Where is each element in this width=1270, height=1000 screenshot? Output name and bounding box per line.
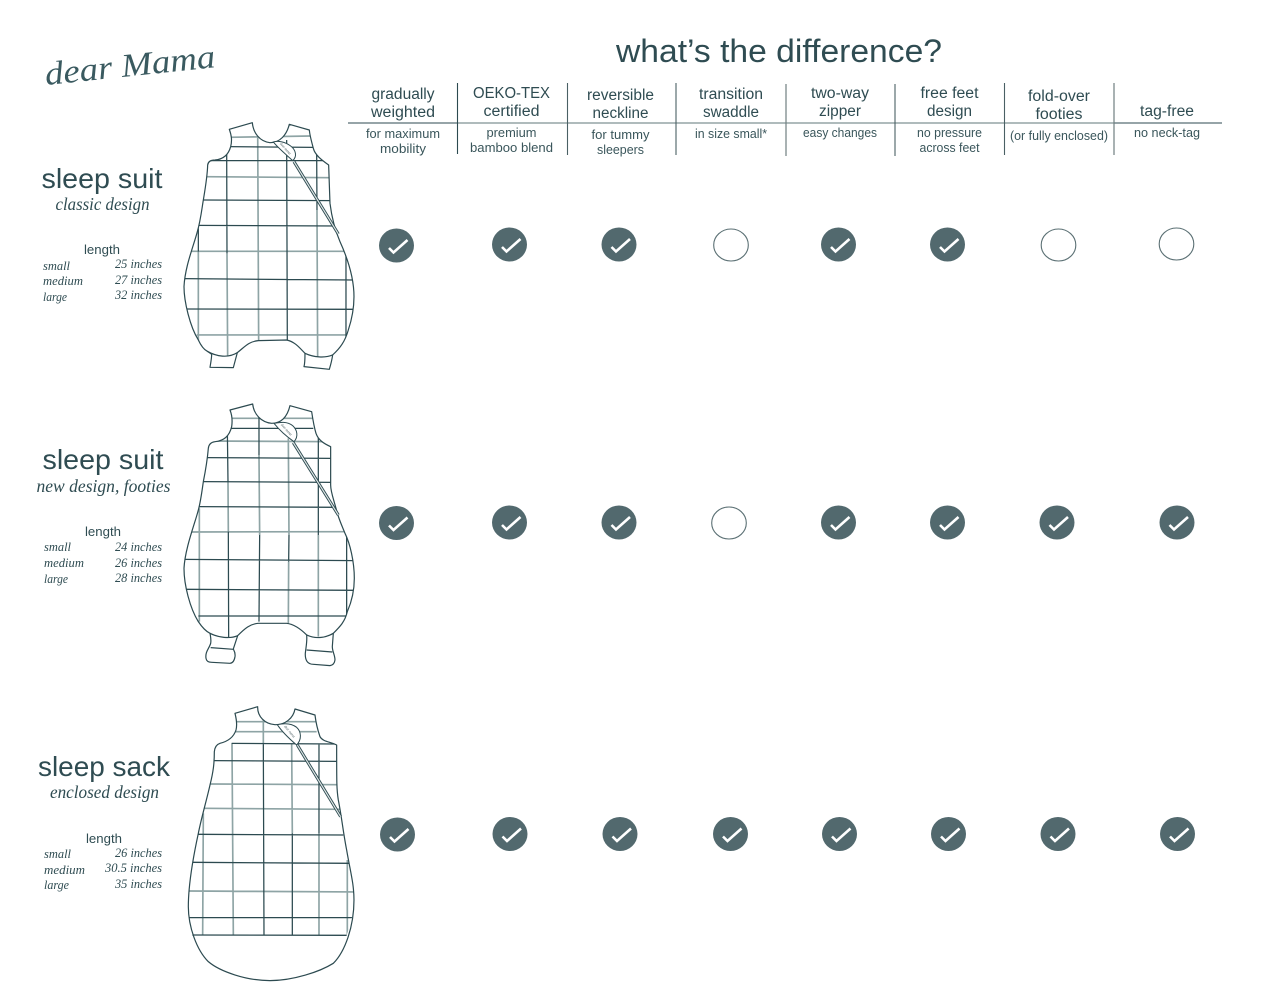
icon: check <box>492 506 527 540</box>
column: reversible neckline: sleepers <box>597 143 644 157</box>
column: free feet design <box>917 85 982 155</box>
icon: empty circle <box>1159 228 1194 260</box>
column: transition swaddle: swaddle <box>703 104 759 121</box>
neck tag: dear mama <box>279 141 292 156</box>
row label: sleep sack enclosed design <box>38 751 171 892</box>
row label: sleep sack enclosed design: length <box>86 831 122 846</box>
icon: check <box>822 817 857 851</box>
header rule <box>348 122 458 124</box>
column: reversible neckline: reversible <box>587 87 654 104</box>
row label: sleep suit classic design: 27 inches <box>115 273 162 287</box>
zipper <box>294 162 338 234</box>
neck tag <box>274 422 297 442</box>
column: reversible neckline: neckline <box>592 105 648 122</box>
column: transition swaddle: transition <box>699 86 763 103</box>
logo: dear Mama: dear Mama <box>43 39 217 93</box>
column: gradually weighted: for maximum <box>366 127 440 141</box>
column: gradually weighted: weighted <box>370 104 435 121</box>
column: gradually weighted <box>366 86 440 156</box>
row label: sleep sack enclosed design: small <box>44 847 72 861</box>
row label: sleep suit new design, footies: 28 inches <box>115 571 162 585</box>
column: free feet design: no pressure <box>917 126 982 140</box>
row label: sleep sack enclosed design: sleep sack <box>38 751 171 782</box>
icon: check <box>380 818 415 852</box>
column: two-way zipper: two-way <box>811 85 869 102</box>
outline <box>188 707 354 981</box>
column: transition swaddle: in size small* <box>695 127 767 141</box>
row label: sleep suit classic design: large <box>43 290 67 304</box>
neck tag: dear mama <box>280 422 293 437</box>
icon: check <box>492 817 528 851</box>
column: OEKO-TEX certified: certified <box>484 103 540 120</box>
icon: empty circle <box>712 507 746 539</box>
column: fold-over footies: fold-over <box>1028 88 1090 105</box>
column: fold-over footies: (or fully enclosed) <box>1010 129 1108 143</box>
icon: check <box>602 506 636 540</box>
row label: sleep suit new design, footies: new design, footies <box>36 476 171 496</box>
icon: check <box>602 228 636 262</box>
column: fold-over footies <box>1010 88 1108 143</box>
row label: sleep sack enclosed design: medium <box>44 863 85 877</box>
outline <box>184 404 354 666</box>
icon: empty circle <box>1041 229 1076 261</box>
row label: sleep suit classic design: 32 inches <box>114 288 162 302</box>
icon: check <box>931 817 966 851</box>
column: two-way zipper <box>803 85 877 140</box>
row label: sleep sack enclosed design: 30.5 inches <box>104 861 162 875</box>
row label: sleep sack enclosed design: 26 inches <box>115 846 162 860</box>
row label: sleep suit classic design: classic design <box>56 194 150 214</box>
row label: sleep suit new design, footies: 24 inches <box>115 540 162 554</box>
column: gradually weighted: mobility <box>380 142 427 156</box>
row label: sleep suit classic design: length <box>84 242 120 257</box>
row label: sleep suit new design, footies: length <box>85 524 121 539</box>
row label: sleep suit new design, footies: small <box>44 540 72 554</box>
icon: check <box>821 506 856 540</box>
row label: sleep suit new design, footies: 26 inches <box>115 556 162 570</box>
zipper <box>293 443 338 515</box>
column: OEKO-TEX certified: premium <box>486 126 536 140</box>
neck tag <box>277 724 300 745</box>
column: reversible neckline: for tummy <box>592 128 650 142</box>
icon: check <box>1040 506 1074 540</box>
column: free feet design: design <box>927 103 972 120</box>
column: tag-free: tag-free <box>1140 103 1194 120</box>
row label: sleep suit new design, footies: large <box>44 572 68 586</box>
column: OEKO-TEX certified: bamboo blend <box>470 141 553 155</box>
illustration: sleep suit classic <box>183 123 355 369</box>
icon: check <box>602 817 638 851</box>
row label: sleep suit classic design: 25 inches <box>115 257 162 271</box>
icon: empty circle <box>714 229 748 261</box>
column: free feet design: across feet <box>920 141 980 155</box>
row label: sleep suit new design, footies: medium <box>44 556 84 570</box>
illustration: sleep sack <box>188 707 355 981</box>
neck tag: dear mama <box>283 724 296 739</box>
column: fold-over footies: footies <box>1036 106 1083 123</box>
row of marks: sleep suit classic <box>379 228 1194 262</box>
row label: sleep suit new design, footies <box>36 444 171 586</box>
column: two-way zipper: zipper <box>819 103 861 120</box>
icon: check <box>821 228 856 262</box>
row label: sleep suit classic design: sleep suit <box>42 163 163 194</box>
column: OEKO-TEX certified <box>470 85 553 155</box>
zipper <box>297 745 341 817</box>
icon: check <box>1160 506 1194 540</box>
row label: sleep sack enclosed design: large <box>44 878 69 892</box>
column dividers <box>458 83 1114 156</box>
comparison table header <box>348 83 1222 157</box>
row label: sleep suit classic design: medium <box>43 274 83 288</box>
column: tag-free: no neck-tag <box>1134 126 1200 140</box>
column: transition swaddle <box>695 86 767 141</box>
icon: check <box>492 228 527 262</box>
icon: check <box>930 506 965 540</box>
icon: check <box>379 506 414 540</box>
icon: check <box>1160 817 1195 851</box>
illustration: sleep suit new design with footies <box>183 404 355 666</box>
column: free feet design: free feet <box>920 85 979 102</box>
icon: check <box>1040 817 1076 851</box>
icon: check <box>379 228 414 262</box>
row of marks: sleep sack <box>380 817 1195 852</box>
row label: sleep suit new design, footies: sleep suit <box>42 444 164 475</box>
outline <box>184 123 354 369</box>
column: OEKO-TEX certified: OEKO-TEX <box>473 85 551 102</box>
icon: check <box>713 817 748 851</box>
column: two-way zipper: easy changes <box>803 126 877 140</box>
column: reversible neckline <box>587 87 654 157</box>
neck tag <box>273 141 296 161</box>
icon: check <box>930 228 965 262</box>
row label: sleep suit classic design: small <box>43 259 71 273</box>
row of marks: sleep suit new design <box>379 506 1194 540</box>
row label: sleep sack enclosed design: enclosed design <box>50 782 159 802</box>
title: what’s the difference? <box>615 33 942 69</box>
column: gradually weighted: gradually <box>372 86 435 103</box>
row label: sleep suit classic design <box>42 163 163 304</box>
row label: sleep sack enclosed design: 35 inches <box>114 877 162 891</box>
column: tag-free <box>1134 103 1200 140</box>
